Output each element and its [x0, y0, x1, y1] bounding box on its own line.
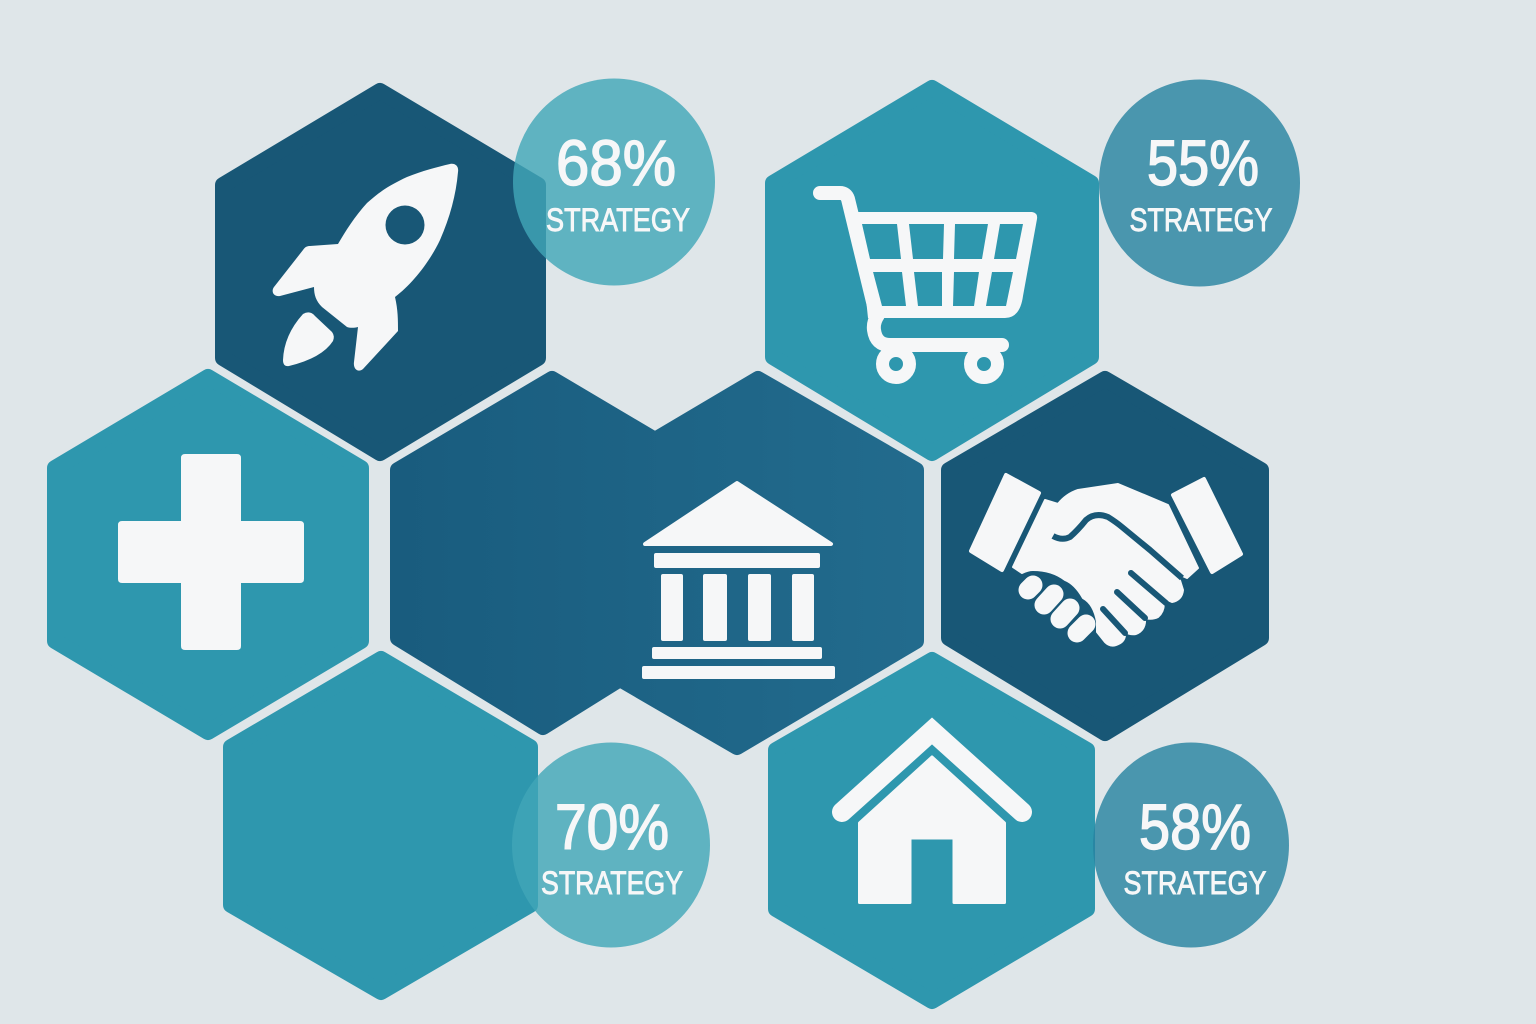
- badge: 70% strategy: [512, 742, 710, 948]
- icon: bank: [642, 483, 835, 679]
- icon: handshake: [971, 475, 1241, 646]
- icon: rocket: [273, 164, 458, 371]
- hexagon: handshake: [949, 379, 1261, 733]
- badge: 55% strategy: 55%: [1147, 127, 1259, 199]
- badge: 55% strategy: STRATEGY: [1130, 202, 1272, 238]
- hexagon: rocket: [223, 91, 538, 453]
- badge: 58% strategy: STRATEGY: [1124, 865, 1266, 901]
- badge: 70% strategy: 70%: [555, 791, 669, 863]
- hexagon: shopping cart: [773, 88, 1091, 453]
- icon: medical cross: [118, 454, 304, 650]
- badge: 70% strategy: STRATEGY: [541, 865, 683, 901]
- icon: house: [842, 731, 1022, 902]
- hexagon: bank, merged double cell: [398, 379, 916, 747]
- badge: 68% strategy: 68%: [556, 127, 676, 199]
- badge: 68% strategy: STRATEGY: [546, 202, 690, 238]
- hexagon: empty lower left: [231, 659, 530, 992]
- badge: 58% strategy: [1093, 742, 1289, 948]
- badge: 58% strategy: 58%: [1139, 791, 1251, 863]
- badge: 68% strategy: [513, 78, 715, 286]
- hexagon: medical cross: [55, 377, 361, 732]
- icon: shopping cart: [820, 193, 1037, 378]
- badge: 55% strategy: [1099, 80, 1300, 286]
- hexagon: house: [776, 660, 1087, 1001]
